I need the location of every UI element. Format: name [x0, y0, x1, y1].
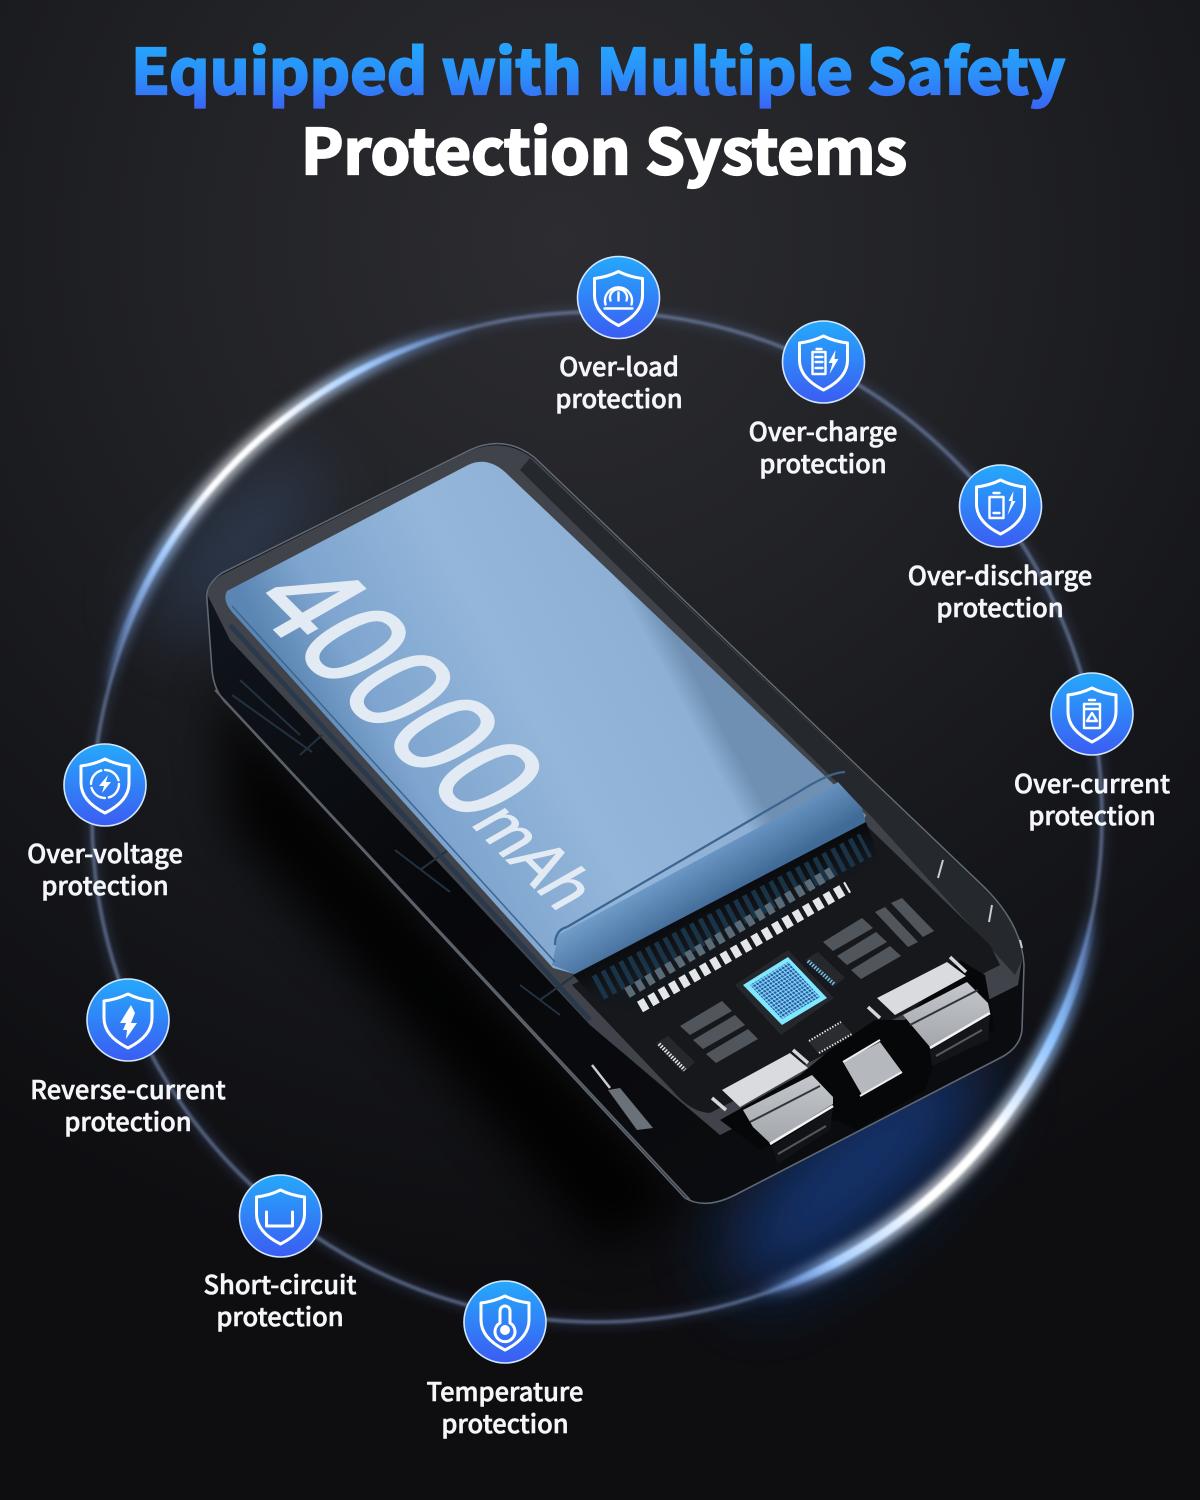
label: temperature: protection — [441, 1404, 569, 1441]
icon: over-current — [1051, 673, 1133, 755]
blue aluminium top face — [225, 462, 866, 974]
label: over-current: Over-current — [1014, 764, 1170, 801]
feature: over-discharge — [908, 465, 1092, 625]
black port frame — [700, 960, 995, 1150]
feature: reverse-current — [30, 979, 226, 1139]
feature: over-charge — [749, 321, 897, 481]
label: reverse-current: Reverse-current — [30, 1070, 226, 1107]
label: over-load: Over-load — [559, 347, 679, 384]
feature: short-circuit — [204, 1175, 356, 1334]
title: Equipped with Multiple Safety — [131, 22, 1065, 112]
capacity text: 40000 — [221, 539, 579, 839]
feature: over-load — [555, 256, 683, 416]
power bank — [207, 444, 1024, 1250]
ribbed heat sink — [573, 822, 880, 1012]
title — [131, 22, 1065, 192]
clear lid rim — [208, 445, 1022, 1135]
feature: over-voltage — [27, 744, 183, 903]
label: short-circuit: protection — [216, 1297, 344, 1334]
dark right side of rim — [520, 458, 1022, 975]
label: over-discharge: Over-discharge — [908, 556, 1092, 593]
chip groups — [656, 898, 934, 1073]
left USB port — [712, 1050, 833, 1164]
label: over-load: protection — [555, 379, 683, 416]
pin rows — [627, 872, 848, 1007]
clear cover edge — [555, 772, 845, 945]
glass glints — [938, 860, 1022, 948]
label: over-current: protection — [1028, 796, 1156, 833]
label: over-charge: protection — [759, 444, 887, 481]
label: short-circuit: Short-circuit — [204, 1265, 356, 1302]
feature: over-current — [1014, 673, 1170, 833]
label: temperature: Temperature — [426, 1372, 584, 1409]
front lip of battery — [552, 782, 866, 974]
shell body — [207, 444, 1024, 1203]
title: Protection Systems — [301, 102, 907, 192]
feature: temperature — [426, 1281, 584, 1441]
circuit board — [572, 825, 1000, 1113]
icon: over-discharge — [960, 465, 1042, 547]
icon: temperature — [464, 1281, 546, 1363]
chip pins — [659, 961, 852, 1070]
label: over-voltage: protection — [41, 866, 169, 903]
glowing ring — [92, 312, 1102, 1322]
side micro port — [592, 1065, 653, 1130]
USB-C port — [833, 1028, 923, 1127]
icon: short-circuit — [240, 1175, 322, 1257]
label: over-discharge: protection — [936, 588, 1064, 625]
icon: over-voltage — [64, 744, 146, 826]
side translucent latches — [215, 625, 690, 1200]
right USB port — [868, 957, 990, 1066]
cast shadow — [215, 680, 690, 1250]
left edge highlight — [232, 606, 555, 962]
icon: over-load — [578, 256, 660, 338]
label: reverse-current: protection — [64, 1102, 192, 1139]
label: over-charge: Over-charge — [749, 412, 897, 449]
icon: reverse-current — [87, 979, 169, 1061]
main processor — [735, 950, 834, 1035]
icon: over-charge — [782, 321, 864, 403]
label: over-voltage: Over-voltage — [27, 834, 183, 871]
capacity text: mAh — [457, 793, 613, 920]
